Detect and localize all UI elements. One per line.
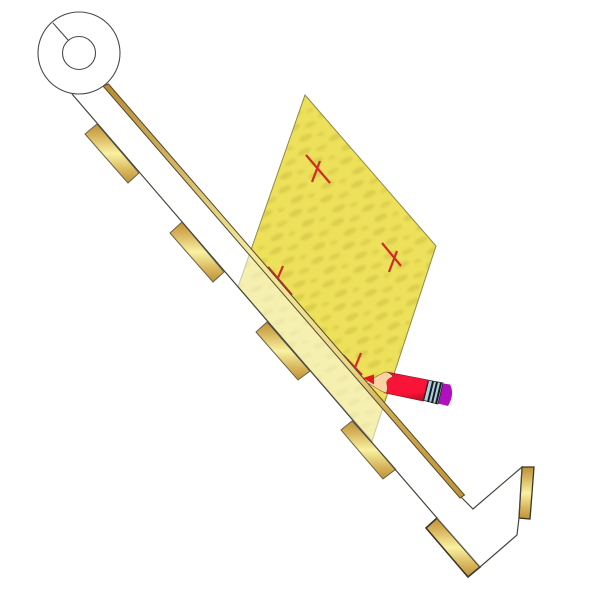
dial [38,12,120,94]
ferrule [422,380,443,404]
tab 4 [341,421,396,479]
red body [378,372,428,401]
translucent rule body [72,85,522,567]
pencil [363,372,452,406]
tab 1 [85,124,139,183]
diagram: folding rule and marked paper [37,12,535,578]
lead tip [363,374,374,384]
red cross marks [268,155,401,375]
bottom bar [426,518,480,577]
eraser [436,383,452,406]
long strip [103,84,464,498]
right end bar [519,467,534,519]
rule body outline [72,94,522,567]
tab 2 [170,222,224,282]
wood tip [366,372,392,393]
yellow paper [230,90,440,445]
tab 3 [256,322,310,380]
